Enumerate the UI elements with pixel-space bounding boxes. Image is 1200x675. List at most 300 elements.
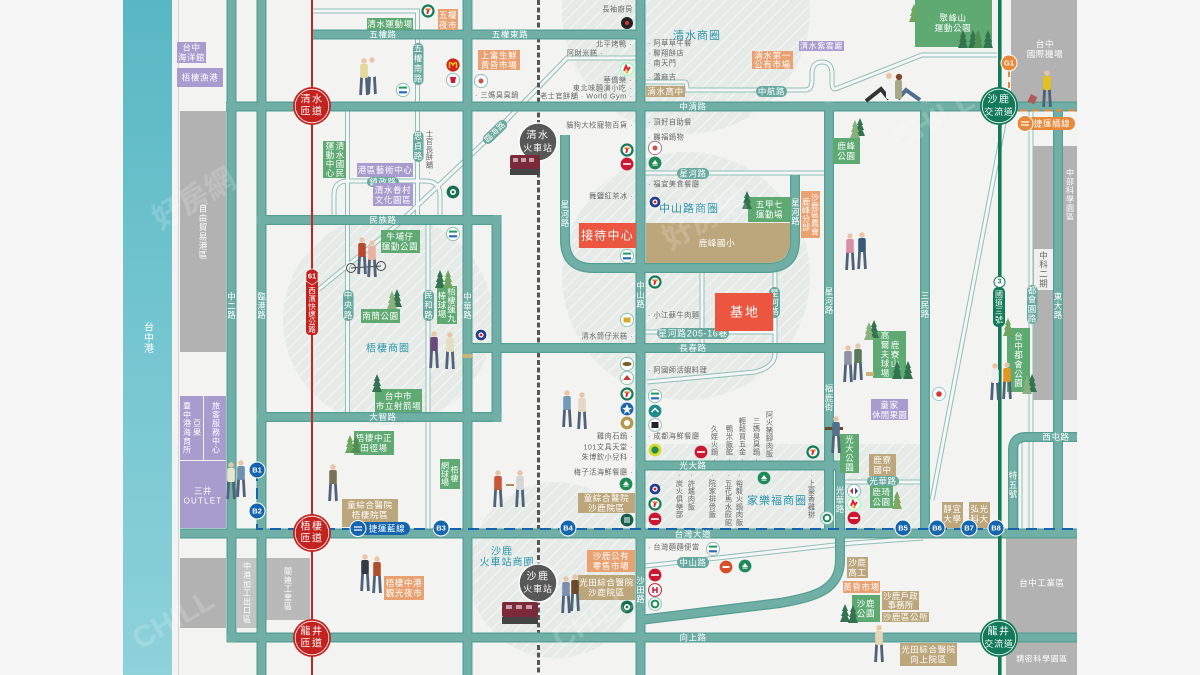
interchange: 龍井匝道: 龍井 [300, 624, 324, 638]
station: 沙鹿火車站: 沙鹿 [526, 570, 550, 582]
watermark [127, 83, 980, 656]
commercial district: Wuqi circle [283, 215, 493, 425]
store list west of Zhongshan Rd: 101文具天堂 · [583, 442, 633, 452]
label: 沙鹿高工 [847, 557, 868, 578]
pill: 五權南路: 五權南路 [413, 44, 423, 84]
icon: green logo [758, 472, 770, 484]
label: 梧棲運九棒球場 [437, 286, 457, 324]
label: 梧棲中正田徑場 [354, 431, 394, 455]
icon: red logo [621, 158, 633, 170]
pill: 思貞路: 思貞路 [413, 132, 423, 162]
label: 光大公園: 光大公園 [844, 434, 854, 472]
icon: black logo [649, 419, 661, 431]
station: 沙鹿火車站: 火車站 [523, 583, 553, 594]
station: 沙鹿火車站 [519, 564, 557, 602]
badge: National Freeway 3: 3 [998, 278, 1002, 286]
label: 光田綜合醫院向上院區: 光田綜合醫院 [901, 644, 956, 654]
label: 弘光科大: 科大 [970, 514, 989, 524]
label: 童綜合醫院沙鹿院區: 沙鹿院區 [588, 503, 625, 513]
MRT stop G1: G1 [1004, 58, 1014, 68]
label: 梧棲中港觀光夜市 [384, 576, 424, 600]
label: 靜宜大學: 靜宜 [943, 504, 962, 514]
watermark: CHILL [887, 83, 980, 156]
vertical store names: 三媽臭臭鍋 · [752, 417, 762, 462]
store list west of Zhongshan Rd: 長袖廚房 [602, 4, 633, 14]
vertical store names: · 院家排骨飯 [708, 474, 718, 519]
label: 童家休閒果園: 童家 [880, 400, 899, 410]
label: 清水第一公有市場: 清水第一 [754, 50, 791, 60]
legend: MRT orange line: 捷運橘線 [1034, 118, 1070, 128]
label: 清水第一公有市場: 公有市場 [754, 60, 791, 70]
label: 南簡公園 [361, 309, 400, 323]
icon: PX mart [649, 196, 661, 208]
icon: family mart [648, 389, 662, 403]
main roads [180, 0, 1077, 675]
gray zone: CTSP: 中科二期 [1038, 250, 1048, 288]
pill: 中央路: 中央路 [343, 290, 353, 320]
icon: family mart [396, 83, 410, 97]
label: 沙鹿戶政事務所 [882, 591, 919, 610]
icon: orange-red logo [720, 561, 732, 573]
MRT stop B2 [249, 503, 265, 519]
icon: restaurant yellow [620, 313, 634, 327]
vertical store names: 輕鬆買五金 · [738, 417, 748, 462]
label: 鹿寮國中: 鹿寮 [873, 455, 892, 465]
gray zone: free trade port [180, 111, 226, 352]
icon: PX mart [475, 329, 487, 341]
school block: Lufeng Elementary: 鹿峰國小 [699, 238, 735, 248]
icon: Starbucks [621, 601, 633, 613]
label: 清水運動場: 清水運動場 [367, 19, 413, 29]
road label: 三民路: 三民路 [920, 291, 930, 319]
commercial district: Zhongshan Rd circle [562, 152, 810, 400]
expressway 61 line [311, 0, 313, 675]
label: 五權夜市 [438, 9, 458, 30]
label: 梧棲中正田徑場: 梧棲中正 [356, 433, 392, 443]
icon: round medical logo [932, 387, 946, 401]
purple block: harbor & cruise centre: 臺中港海育所 [182, 401, 192, 455]
road label: 光華路: 光華路 [835, 486, 845, 514]
label: 聚峰山運動公園 [915, 0, 992, 47]
label: 五權夜市: 夜市 [439, 20, 457, 30]
label: 童綜合醫院梧棲院區 [342, 499, 398, 527]
district name: 沙鹿火車站商圈: 火車站商圈 [480, 556, 534, 568]
vertical store names: · 裕毅火鍋肉飯 [736, 474, 744, 527]
commercial district: Shalu station circle [468, 482, 644, 658]
road label: 星河路: 星河路 [824, 287, 834, 315]
label: 牛埔仔運動公園 [381, 230, 420, 253]
store list west of Zhongshan Rd: 阿財米糕 · [567, 48, 603, 58]
label: 清水眷村文化園區 [373, 183, 413, 206]
vertical store names: 久姪火鍋 · [710, 424, 720, 462]
label: 清水眷村文化園區: 文化園區 [375, 195, 411, 205]
district name: 家樂福商圈: 家樂福商圈 [747, 493, 807, 507]
commercial district: Carrefour band [640, 444, 930, 530]
vertical store names: · 炭火俱樂部 [676, 474, 684, 519]
purple block: Mitsui Outlet [180, 461, 226, 528]
MRT stop G1 [1001, 55, 1017, 71]
road label: 福鹿街: 福鹿街 [824, 384, 834, 412]
label: 鹿峰公園: 鹿峰 [837, 141, 856, 151]
store list east of Zhongshan Rd: · 聯翔餅店 [648, 48, 684, 58]
label: 清水國民運動中心: 運動中心 [325, 141, 335, 177]
label: 沙鹿區公所: 沙鹿區公所 [883, 612, 928, 622]
district name: 中山路商圈: 中山路商圈 [659, 201, 719, 215]
MRT stop B4 [560, 520, 576, 536]
interchange: 沙鹿交流道: 沙鹿 [988, 92, 1010, 106]
icon: train Shalu [502, 602, 538, 624]
MRT stop B3: B3 [436, 524, 446, 532]
label: 光田綜合醫院沙鹿院區: 光田綜合醫院 [579, 578, 634, 588]
icon: gold logo [621, 417, 633, 429]
icon: red logo [695, 446, 707, 458]
label: 童綜合醫院沙鹿院區: 童綜合醫院 [584, 493, 629, 503]
road label: 向上路: 向上路 [679, 632, 707, 642]
icon: star bank [621, 403, 633, 415]
gray zone: airport [1011, 0, 1077, 105]
label: 梧棲中港觀光夜市: 梧棲中港 [386, 578, 422, 588]
label: 鹿峰公園 [833, 138, 860, 164]
interchange: 龍井交流道 [980, 619, 1018, 657]
road label: 長春路: 長春路 [679, 343, 707, 353]
district name: 清水商圈: 清水商圈 [673, 28, 721, 42]
figure: sitting couple [866, 73, 920, 101]
figure: shoppers [227, 460, 245, 499]
icon: esl [474, 74, 488, 88]
background: map base [123, 0, 1078, 675]
road label: 中清路: 中清路 [679, 102, 707, 112]
icon: family mart [620, 249, 634, 263]
label: 上富生鮮黃昏市場: 上富生鮮 [481, 50, 517, 60]
store list west of Zhongshan Rd: 朱博欽小兒科 · [581, 452, 633, 462]
figure: Shalu elder couple [562, 574, 579, 613]
label: 聚峰山運動公園: 聚峰山 [939, 13, 967, 23]
label: 光田綜合醫院向上院區: 向上院區 [910, 654, 947, 664]
label: 台中都會公園 [1007, 328, 1030, 392]
district name: 梧棲商圈: 梧棲商圈 [366, 342, 410, 354]
label: 沙鹿戶政事務所: 沙鹿戶政 [883, 591, 918, 601]
icon: green C logo [821, 512, 833, 524]
label: 沙鹿高工: 沙鹿 [848, 558, 867, 568]
label: 聚峰山運動公園: 運動公園 [935, 23, 971, 33]
road label: 西屯路: 西屯路 [1042, 432, 1070, 442]
label: 靜宜大學 [942, 502, 963, 528]
freeway 3 line [998, 0, 1002, 675]
station: 清水火車站 [519, 123, 557, 161]
icon: Starbucks [447, 186, 459, 198]
label: 梧棲網球場: 網球場 [440, 460, 450, 487]
label: 南簡公園: 南簡公園 [362, 311, 399, 321]
label: 梧棲網球場: 梧棲 [450, 465, 459, 483]
icon: red logo [649, 569, 661, 581]
commercial district: Qingshui circle [562, 0, 810, 134]
label: 沙鹿公園 [852, 595, 880, 622]
icon: green C logo [649, 598, 661, 610]
icon: KFC [446, 73, 460, 87]
MRT stop B3 [433, 520, 449, 536]
gray zone: precision park: 精密科學園區 [1016, 654, 1068, 664]
highlight: reception centre [579, 223, 636, 248]
railway line [537, 0, 540, 675]
road label: 東大路: 東大路 [1053, 292, 1063, 320]
label: 高爾夫球場 鹿寮山: 高爾夫球場 [880, 331, 890, 378]
MRT stop B1 [249, 462, 265, 478]
label: 高爾夫球場 鹿寮山: 鹿寮山 [890, 340, 900, 369]
label: 鹿寮國中: 國中 [873, 465, 892, 475]
icon: pink logo [648, 141, 662, 155]
pill: 民和路: 民和路 [424, 290, 434, 320]
school block: Lufeng Elementary [646, 223, 790, 263]
district name: 沙鹿火車站商圈: 沙鹿 [491, 544, 513, 558]
icon: train Qingshui [510, 155, 540, 175]
icon: tree logo [649, 444, 661, 456]
badge: National Freeway 3: 國道三號 [994, 290, 1004, 325]
label: 台中市市立射箭場: 市立射箭場 [376, 401, 421, 411]
label: 牛埔仔運動公園: 牛埔仔 [386, 232, 414, 242]
gray zone: precision park [1006, 642, 1077, 675]
store list east of Zhongshan Rd [648, 38, 707, 552]
pill: 中山路 south: 中山路 [679, 558, 707, 568]
purple block: Mitsui Outlet: 三井 [194, 486, 212, 496]
figure: jogging couple [991, 362, 1011, 400]
label: 清水第一公有市場 [752, 50, 793, 70]
interchange: 清水匝道 [293, 87, 331, 125]
icon: mountain logo [620, 371, 634, 385]
pill: 星河路205-16巷: 星河路205-16巷 [658, 328, 728, 338]
label: 童綜合醫院梧棲院區: 梧棲院區 [352, 510, 388, 520]
vertical store names: · 五花馬水餃館 [724, 474, 734, 527]
label: 沙鹿公有零售市場: 沙鹿公有 [593, 551, 629, 561]
store list east of Zhongshan Rd: · 瀟麻吉 [648, 72, 676, 82]
MRT stop B6 [929, 520, 945, 536]
interchange: 龍井匝道 [293, 619, 331, 657]
thin local roads [312, 11, 1031, 566]
label: 梧棲中正田徑場: 田徑場 [360, 443, 388, 453]
gray zone: Taichung export processing zone [180, 558, 257, 628]
label: 靜宜大學: 大學 [943, 514, 962, 524]
figure: elder couple [844, 343, 874, 382]
label: 台中市市立射箭場 [375, 389, 422, 412]
store list east of Zhongshan Rd: · 阿國師活蝦料理 [648, 366, 707, 374]
label: 台中都會公園: 台中都會公園 [1014, 332, 1024, 388]
label: 五權夜市: 五權 [439, 10, 457, 20]
store list west of Zhongshan Rd: 北平烤鴨 · [596, 40, 632, 48]
label: 上富生鮮黃昏市場 [478, 50, 520, 70]
label: 弘光科大 [969, 502, 990, 528]
store list west of Zhongshan Rd: 貓狗大校寵物百貨 · [566, 120, 633, 130]
road label: 中山路: 中山路 [636, 281, 646, 309]
label: 童家休閒果園: 休閒果園 [872, 410, 907, 420]
label: 黃昏市場: 黃昏市場 [843, 582, 880, 592]
gray zone: Taichung industrial park: 台中工業區 [1019, 578, 1065, 588]
gray zone: free trade port: 自由貿易港區 [198, 204, 208, 260]
road label: 五權路: 五權路 [369, 30, 397, 40]
label: 鹿琦公園: 鹿琦 [872, 487, 891, 497]
interchange: 梧棲匝道: 匝道 [300, 532, 324, 544]
label: 台中市市立射箭場: 台中市 [385, 391, 412, 401]
icon: Carrefour [847, 484, 861, 498]
gray zone: CTSP: 中部科學園區 [1066, 168, 1074, 221]
label: 沙鹿公園: 沙鹿 [857, 598, 875, 608]
road labels [226, 30, 1070, 642]
gray zone: Guanlian industrial park [266, 558, 310, 620]
icon: 7-11 [620, 143, 634, 157]
icon: red H logo [649, 584, 661, 596]
label: 鹿峰公園: 公園 [837, 151, 856, 161]
MRT stop B7 [961, 520, 977, 536]
label: 沙鹿區農會鹿峰分部: 鹿峰分部 [802, 196, 810, 232]
road label: 中二路: 中二路 [226, 292, 236, 320]
road label: 沙田路: 沙田路 [636, 576, 646, 604]
gray zone: airport: 台中 [1036, 39, 1054, 49]
figure: old man [329, 464, 337, 501]
gray zone: Taichung export processing zone: 中港加工出口區 [242, 561, 252, 624]
label: 台中海洋館: 海洋館 [178, 52, 205, 62]
label: 弘光科大: 弘光 [970, 504, 989, 514]
vertical store names [426, 129, 816, 527]
MRT stop B5 [895, 520, 911, 536]
pill: 星河路 at site: 星河路 [770, 289, 780, 317]
pill: 都會園路: 都會園路 [1027, 286, 1037, 323]
store list east of Zhongshan Rd: · 阿草草牛餐 [648, 38, 692, 48]
label: 港區藝術中心 [357, 163, 413, 177]
MRT stop B6: B6 [932, 524, 942, 532]
road label: 台灣大道: 台灣大道 [675, 529, 711, 539]
legend: MRT blue line: 捷運藍線 [369, 524, 405, 534]
harbour edge lines [178, 0, 179, 675]
MRT orange line dashed [1009, 70, 1077, 110]
badge: Route 61 West Coast Expressway: 西濱快速公路 [307, 286, 316, 333]
purple block: harbor & cruise centre: 旅客服務中心 [212, 401, 220, 454]
store list west of Zhongshan Rd: 雞肉石鍋 · [597, 432, 633, 440]
icon: mos [620, 357, 634, 371]
store list east of Zhongshan Rd: · 南天門 [648, 58, 676, 68]
MRT blue line dashed [257, 470, 1077, 529]
vertical store names: · 上豪香雞排 [808, 474, 816, 519]
store list west of Zhongshan Rd: 東北味麵演小吃 · [573, 84, 632, 92]
label: 童綜合醫院沙鹿院區 [578, 493, 635, 513]
icon: 7-11 [620, 387, 634, 401]
label: 光田綜合醫院沙鹿院區 [578, 575, 635, 600]
interchange: 沙鹿交流道: 交流道 [984, 106, 1014, 117]
badge: Route 61 West Coast Expressway: 61 [308, 272, 316, 280]
label: 高爾夫球場 鹿寮山 [873, 331, 906, 378]
road label: 五權東路: 五權東路 [492, 30, 528, 40]
icon: colourful logo [848, 498, 860, 510]
gray zone: airport: 國際機場 [1027, 49, 1063, 59]
vertical store names: · 許爐肉飯 [688, 474, 696, 511]
label: 梧棲運九棒球場: 棒球場 [437, 291, 447, 319]
store list west of Zhongshan Rd: · 三媽臭臭鍋 [475, 90, 519, 100]
district name: 沙鹿火車站商圈 [480, 544, 534, 568]
icon: PX mart [649, 483, 661, 495]
figure: man on bench [825, 416, 843, 453]
icon: family mart [706, 542, 720, 556]
figure: cyclists [346, 237, 386, 277]
figure: traveller [1028, 70, 1051, 107]
label: 沙鹿戶政事務所: 事務所 [887, 600, 914, 610]
sea: Taichung harbour [123, 0, 172, 675]
label: 梧棲網球場 [440, 459, 460, 489]
icon: colourful logo [621, 63, 633, 75]
icon: green logo [620, 478, 632, 490]
store list west of Zhongshan Rd: 舞鹽紅茶冰 · [589, 192, 633, 200]
store list east of Zhongshan Rd: · 饞福鍋物 [648, 132, 684, 142]
label: 梧棲漁港: 梧棲漁港 [182, 72, 218, 82]
icon: dark logo [621, 514, 633, 526]
highlight: site [715, 293, 773, 331]
MRT stop B8 [988, 520, 1004, 536]
watermark: 好房網 [657, 182, 751, 256]
pill: 中航路: 中航路 [758, 86, 785, 96]
interchange: 清水匝道: 匝道 [300, 104, 324, 118]
road label: 臨港路: 臨港路 [256, 292, 266, 320]
gray zone: Taichung industrial park [1006, 538, 1077, 633]
icon: green logo [739, 560, 751, 572]
label: 清水高中: 清水高中 [647, 86, 684, 96]
label: 台中海洋館 [177, 42, 206, 63]
icon: 7-11 top [421, 4, 435, 18]
figure: couple north [360, 57, 376, 95]
pill: 星河路 top: 星河路 [679, 168, 707, 178]
road label: 星河路 left: 星河路 [560, 200, 570, 228]
icon: 7-11 [648, 497, 662, 511]
gray zone: Guanlian industrial park: 關連工業區 [284, 567, 292, 611]
highlight: site: 基地 [730, 304, 760, 320]
station: 清水火車站: 清水 [526, 128, 550, 142]
store list east of Zhongshan Rd: · 頂好自助餐 [648, 118, 692, 126]
icon: family mart [446, 227, 460, 241]
label: 五甲七運動場 [748, 197, 791, 222]
store list west of Zhongshan Rd: 梅子活海鮮餐廳 · [574, 468, 633, 476]
legend: MRT orange line [1017, 116, 1075, 132]
icon: teal logo [649, 405, 661, 417]
label: 童家休閒果園 [871, 399, 908, 420]
trees [345, 4, 1037, 623]
interchange: 龍井匝道: 匝道 [300, 636, 324, 650]
gray zone: CTSP [1033, 146, 1077, 400]
label: 光田綜合醫院向上院區 [900, 643, 957, 666]
highlight: reception centre: 接待中心 [581, 228, 634, 242]
interchange: 龍井交流道: 交流道 [984, 638, 1014, 649]
label: 沙鹿區農會鹿峰分部 [801, 191, 820, 238]
label: 沙鹿公有零售市場 [587, 550, 635, 572]
MRT stop B8: B8 [991, 524, 1001, 532]
MRT stop B1: B1 [252, 466, 262, 474]
label: 鹿琦公園: 公園 [872, 497, 891, 507]
road label: 大智路: 大智路 [369, 412, 397, 422]
store list west of Zhongshan Rd: 清水筒仔米糕 · [581, 332, 633, 340]
label: 童綜合醫院梧棲院區: 童綜合醫院 [347, 500, 393, 510]
purple block: Mitsui Outlet: OUTLET [184, 496, 222, 506]
MRT stop B2: B2 [252, 506, 262, 516]
label: 鹿琦公園 [870, 486, 893, 508]
label: 五甲七運動場: 運動場 [756, 210, 783, 220]
vertical store names: 鴨米飯館 · [726, 424, 734, 462]
road label: 特五號: 特五號 [1008, 471, 1018, 499]
label: 梧棲中港觀光夜市: 觀光夜市 [386, 588, 422, 598]
road label: 中華路: 中華路 [462, 292, 472, 320]
label: 清水紫雲巖: 清水紫雲巖 [800, 40, 843, 50]
label: 沙鹿高工: 高工 [848, 568, 867, 578]
label: 清水眷村文化園區: 清水眷村 [375, 185, 411, 195]
road label: 光大路: 光大路 [679, 460, 707, 470]
figure: cafe couple [494, 470, 524, 507]
road label: 星河路 right: 星河路 [790, 198, 800, 226]
station: 清水火車站: 火車站 [523, 142, 553, 153]
interchange: 梧棲匝道: 梧棲 [300, 520, 324, 532]
icon: red logo [649, 513, 661, 525]
